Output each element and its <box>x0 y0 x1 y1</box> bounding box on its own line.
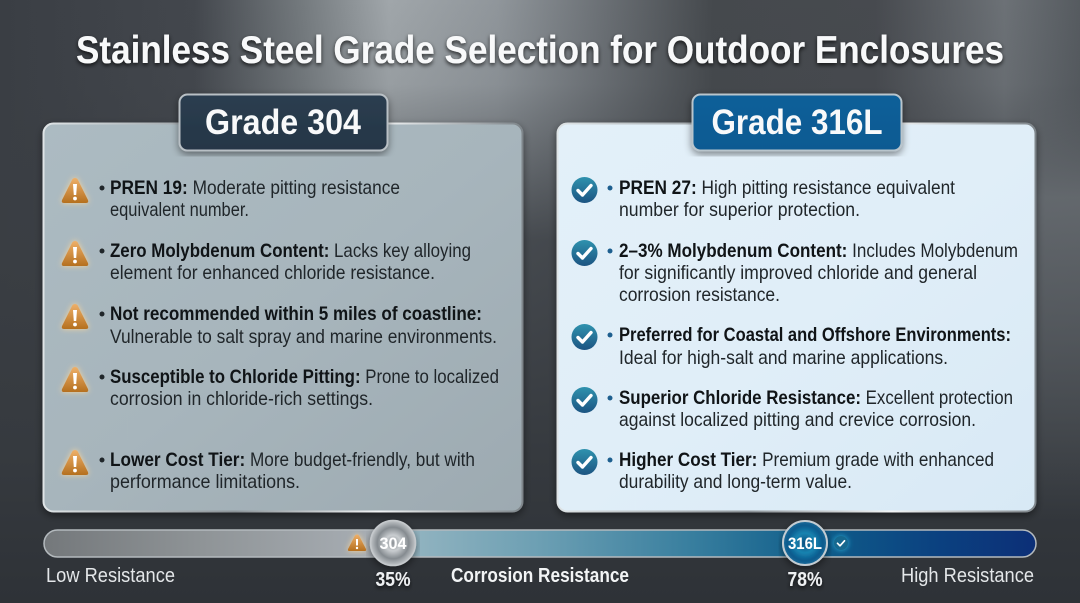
text: PREN 27: PREN 27: High pitting resistance equivalent <box>619 177 956 199</box>
icon: warning 5 <box>62 450 88 475</box>
badge: Grade 304 <box>180 94 388 150</box>
text: 2–3% Molybdenum <box>608 240 1018 306</box>
label: axis title: Corrosion Resistance <box>451 564 629 587</box>
text: PREN 19 <box>100 177 400 221</box>
text: chloride resistance: against localized pitting and crevice corrosion. <box>619 409 976 431</box>
label: 316L percent: 78% <box>788 569 823 591</box>
marker: 304: 304 <box>380 534 407 553</box>
text: chloride resistance <box>608 387 1013 431</box>
text: chloride pitting <box>100 366 499 410</box>
marker: 316L: 316L <box>788 534 822 553</box>
text: PREN 27 <box>608 177 956 221</box>
text: 2–3% Molybdenum: 2–3% Molybdenum Content: Includes Molybdenum <box>619 240 1018 262</box>
label: low resistance: Low Resistance <box>46 564 175 587</box>
text: higher cost <box>608 449 994 493</box>
text: Zero Molybdenum: Zero Molybdenum Content: Lacks key alloying <box>110 240 471 262</box>
marker: 316L <box>783 521 827 565</box>
text: chloride pitting: Susceptible to Chloride Pitting: Prone to localized <box>110 366 499 388</box>
icon: bar warning <box>348 534 366 551</box>
marker: 304 <box>370 520 416 566</box>
text: higher cost: durability and long-term value. <box>619 471 852 493</box>
text: coastal <box>608 324 1011 369</box>
text: chloride pitting: corrosion in chloride-rich settings. <box>110 388 373 410</box>
badge: Grade 316L <box>692 94 902 150</box>
icon: warning 3 <box>62 304 88 329</box>
icon: check 2 <box>572 240 598 266</box>
gradient bar <box>44 530 1036 557</box>
text: PREN 19: PREN 19: Moderate pitting resistance <box>110 177 400 199</box>
text: lower cost: Lower Cost Tier: More budget-friendly, but with <box>110 449 475 471</box>
text: coastline: Vulnerable to salt spray and marine environments. <box>110 326 497 348</box>
title: Stainless Steel Grade Selection for Outdoor Enclosures <box>76 29 1004 72</box>
text: chloride resistance: Superior Chloride Resistance: Excellent protection <box>619 387 1013 409</box>
icon: check 1 <box>572 177 598 203</box>
icon: warning 1 <box>62 178 88 203</box>
text: coastline: Not recommended within 5 miles of coastline: <box>110 303 482 325</box>
badge: Grade 316L: Grade 316L <box>712 103 882 142</box>
text: 2–3% Molybdenum: for significantly improved chloride and general <box>619 262 977 284</box>
text: PREN 27: number for superior protection. <box>619 199 860 221</box>
icon: bar check <box>834 536 848 550</box>
text: coastal: Ideal for high-salt and marine applications. <box>619 347 948 369</box>
text: lower cost: performance limitations. <box>110 471 300 493</box>
panel: Grade 304 <box>44 124 522 512</box>
panel: Grade 316L <box>558 124 1036 512</box>
text: lower cost <box>100 449 475 493</box>
text: PREN 19: equivalent number. <box>110 199 249 221</box>
text: 2–3% Molybdenum: corrosion resistance. <box>619 284 780 306</box>
icon: warning 4 <box>62 367 88 392</box>
text: coastal: Preferred for Coastal and Offshore Environments: <box>619 324 1011 346</box>
text: coastline <box>100 303 497 348</box>
icon: check 5 <box>572 449 598 475</box>
icon: warning 2 <box>62 241 88 266</box>
label: high resistance: High Resistance <box>901 564 1034 587</box>
icon: check 4 <box>572 387 598 413</box>
label: 304 percent: 35% <box>376 569 411 591</box>
corrosion resistance scale <box>44 520 1036 591</box>
text: higher cost: Higher Cost Tier: Premium grade with enhanced <box>619 449 994 471</box>
text: Zero Molybdenum <box>100 240 471 284</box>
text: Zero Molybdenum: element for enhanced chloride resistance. <box>110 262 435 284</box>
icon: check 3 <box>572 324 598 350</box>
badge: Grade 304: Grade 304 <box>205 103 361 142</box>
